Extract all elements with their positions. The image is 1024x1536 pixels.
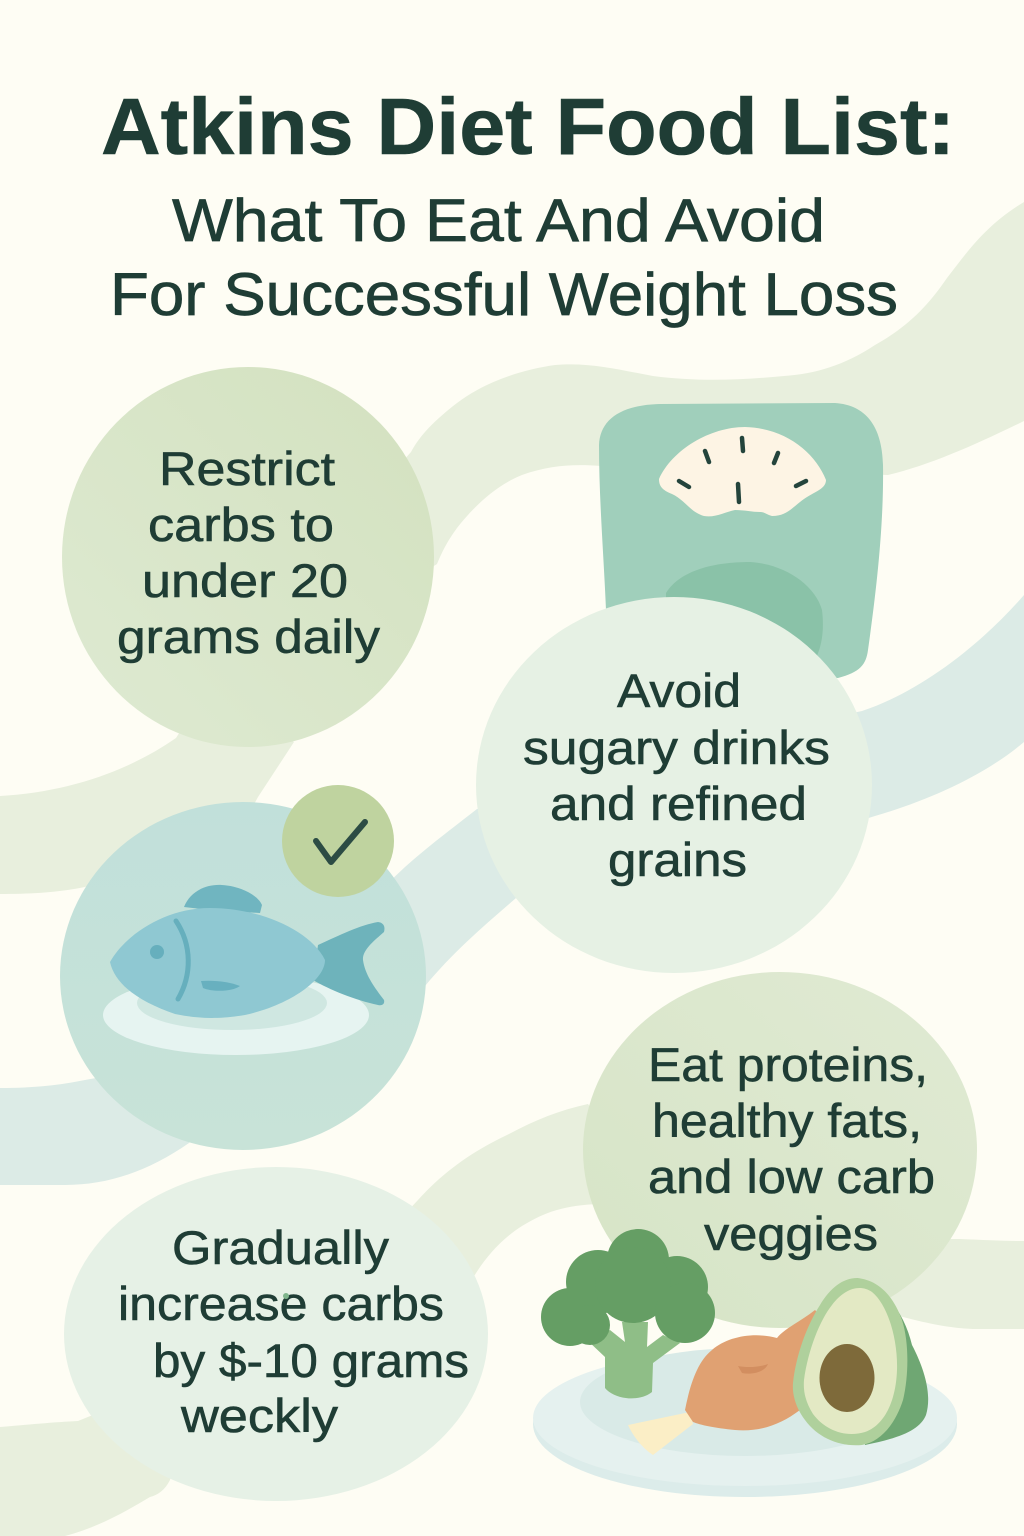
panel: eat proteins xyxy=(583,972,977,1328)
subtitle: For Successful Weight Loss xyxy=(110,261,898,328)
text: restrict carbs: grams daily xyxy=(117,610,381,663)
text: eat proteins: veggies xyxy=(704,1207,878,1260)
text: restrict carbs: Restrict xyxy=(159,442,335,495)
text: increase carbs gradually xyxy=(118,1221,469,1442)
text: increase carbs gradually: increase carbs xyxy=(118,1277,444,1330)
text: avoid sugary drinks: grains xyxy=(608,833,747,886)
icon: fish xyxy=(110,885,384,1018)
text: restrict carbs: under 20 xyxy=(142,554,348,607)
text: eat proteins: healthy fats, xyxy=(652,1094,922,1147)
text: avoid sugary drinks: sugary drinks xyxy=(523,721,830,774)
text: avoid sugary drinks: and refined xyxy=(550,777,807,830)
title: Atkins Diet Food List: xyxy=(101,82,955,171)
text: eat proteins: and low carb xyxy=(648,1150,935,1203)
ribbon: upper green wave xyxy=(0,202,1024,894)
panel: fish on plate xyxy=(60,802,426,1150)
ribbon: blue wave xyxy=(0,595,1024,1185)
text: eat proteins: Eat proteins, xyxy=(648,1038,928,1091)
panel: increase carbs gradually xyxy=(64,1167,488,1501)
icon: broccoli xyxy=(541,1229,715,1398)
text: eat proteins xyxy=(648,1038,935,1260)
text: restrict carbs xyxy=(117,442,381,663)
text: increase carbs gradually: Gradually xyxy=(172,1221,390,1274)
text: increase carbs gradually: weckly xyxy=(180,1389,339,1442)
subtitle xyxy=(110,187,898,328)
icon: check badge xyxy=(282,785,394,897)
icon: plate xyxy=(103,975,369,1055)
text: avoid sugary drinks xyxy=(523,664,830,886)
panel: restrict carbs xyxy=(62,367,434,747)
ribbon: lower green wave xyxy=(0,1104,1024,1536)
panel: avoid sugary drinks xyxy=(476,597,872,973)
icon: food plate xyxy=(533,1229,957,1497)
icon: chicken drumstick xyxy=(628,1310,835,1455)
icon: scale dial xyxy=(659,427,826,516)
subtitle: What To Eat And Avoid xyxy=(172,187,825,254)
icon: avocado xyxy=(793,1278,928,1445)
text: avoid sugary drinks: Avoid xyxy=(617,664,741,717)
text: restrict carbs: carbs to xyxy=(148,498,334,551)
icon: weighing scale xyxy=(599,403,883,680)
text: increase carbs gradually: by $-10 grams xyxy=(153,1334,469,1387)
